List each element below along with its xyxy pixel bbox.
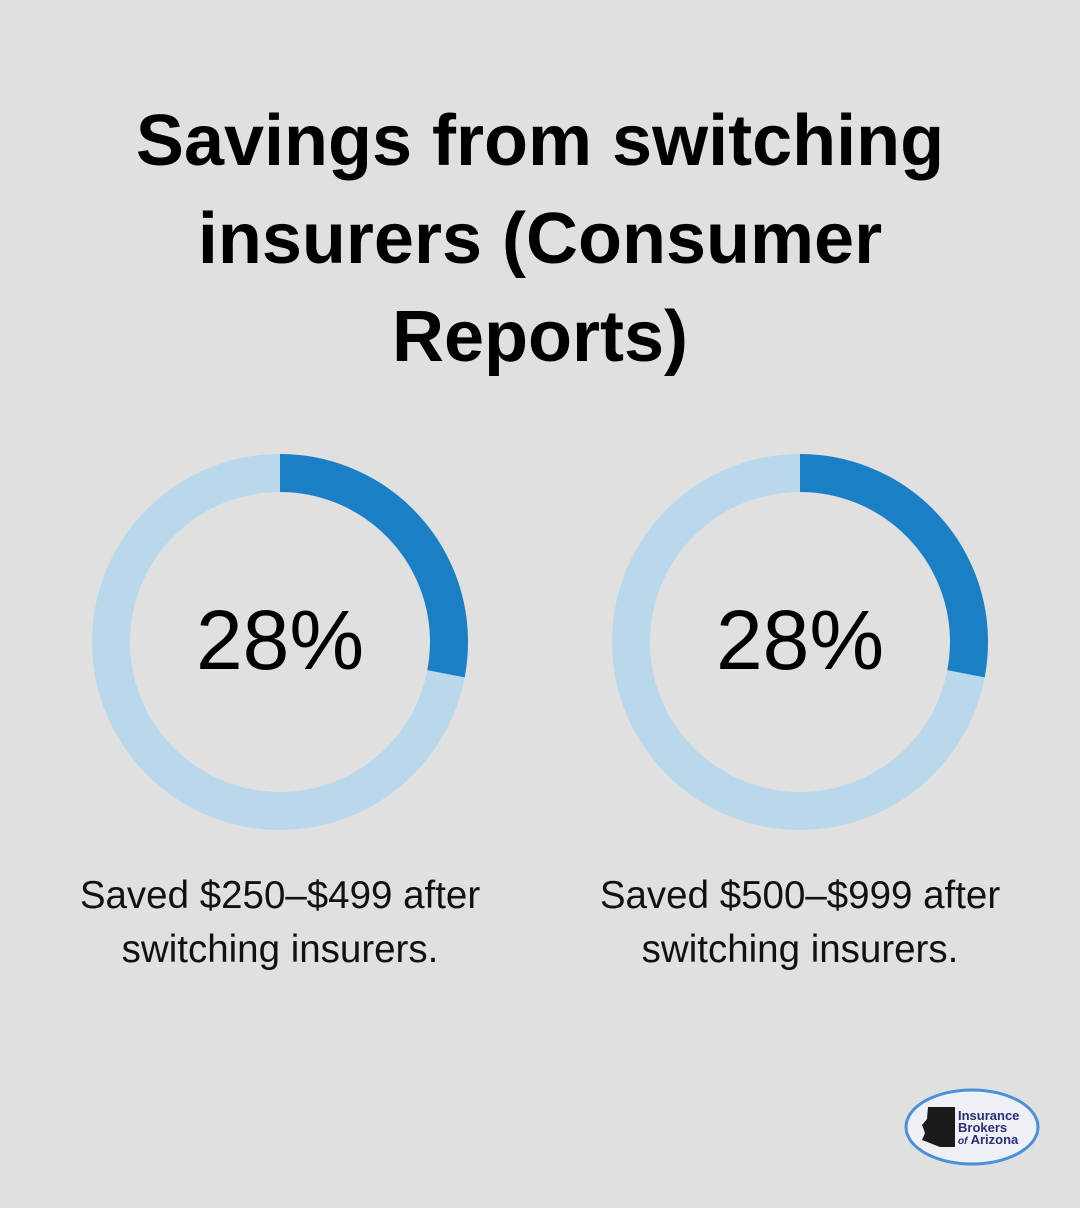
logo: of Arizona [958,1132,1019,1147]
donut chart: right: 28% [716,593,884,687]
donut chart: right [612,454,988,830]
donut chart: left [92,454,468,830]
caption: left: Saved $250–$499 after switching insurers. [80,874,480,971]
logo [904,1088,1040,1166]
logo: Brokers [958,1120,1007,1135]
title: Savings from switching insurers (Consumer Reports) [136,101,944,377]
donut chart: left: 28% [196,593,364,687]
logo: Insurance [958,1108,1019,1123]
caption: right: Saved $500–$999 after switching insurers. [600,874,1000,971]
